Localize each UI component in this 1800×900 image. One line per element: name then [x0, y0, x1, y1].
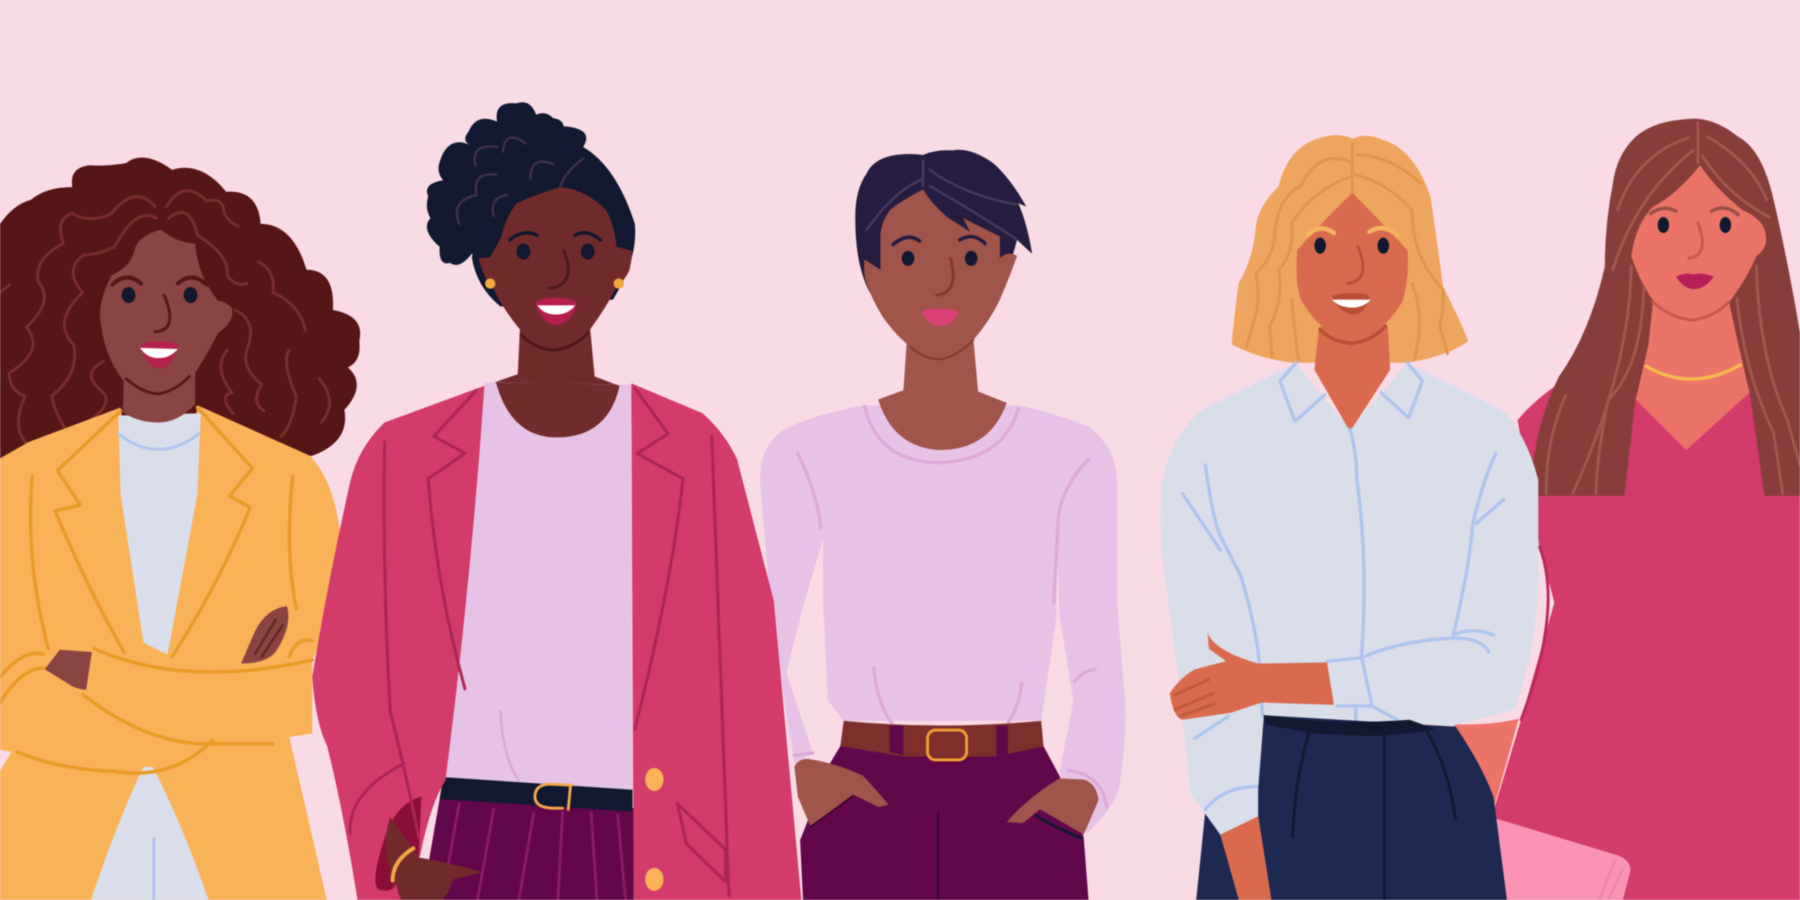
trousers: [800, 746, 1089, 900]
woman 1: curly auburn hair, yellow blazer: [0, 158, 360, 900]
dress: [1481, 383, 1800, 900]
centre line: [153, 838, 155, 900]
neck: [123, 373, 195, 422]
facial features: [112, 278, 207, 394]
buckle: [928, 730, 967, 760]
necklace: [1646, 365, 1740, 379]
top: [442, 382, 633, 792]
shirt: [1161, 363, 1538, 835]
face: [1297, 193, 1408, 343]
hand: left: [45, 650, 92, 690]
dress centre: [1624, 390, 1764, 496]
facial features: [893, 237, 985, 359]
sweater: [760, 405, 1126, 833]
hair: [855, 150, 1032, 315]
woman 4: blonde bob, white shirt, navy trousers: [1161, 135, 1538, 900]
bracelet: [393, 848, 413, 880]
blazer: left panel: [312, 386, 484, 900]
buttons: [645, 768, 664, 891]
hand: right: [1007, 778, 1099, 835]
top folds: [501, 712, 519, 781]
face: [479, 187, 632, 350]
hair strands: [1247, 143, 1448, 359]
neck: [878, 340, 1007, 450]
folder: [1488, 818, 1630, 900]
lower forearm: [1220, 816, 1273, 900]
face: [864, 189, 1017, 358]
shirt lines: [1182, 429, 1504, 809]
hair strands: [867, 161, 1016, 239]
waistband: [1264, 715, 1435, 736]
collar: [864, 406, 1018, 463]
facial features: [1308, 228, 1397, 343]
hand: [386, 817, 482, 900]
woman 3: short dark hair, lilac sweater, plum trousers: [760, 150, 1126, 900]
facial features: [485, 233, 624, 350]
hand: left: [794, 759, 889, 827]
lower shirt: [87, 767, 212, 900]
woman 5: long brown hair, pink dress: [1453, 119, 1800, 900]
hair: [1533, 119, 1800, 496]
hair bun: [427, 102, 586, 265]
neck and chest: [1636, 301, 1749, 450]
face: [1631, 165, 1766, 320]
fingers: [1176, 680, 1215, 716]
forearm and hand: [1170, 634, 1334, 720]
belt loops: [890, 726, 1008, 757]
facial features: [1651, 208, 1738, 320]
blazer: [0, 405, 341, 900]
blazer: right panel: [631, 383, 802, 900]
neck and chest: [488, 327, 631, 453]
shirt: [118, 413, 201, 654]
collar line: [118, 434, 199, 449]
collar: [1280, 363, 1422, 421]
woman 2: black curly updo, pink blazer, plum skirt: [312, 102, 802, 900]
trousers: [1258, 715, 1508, 900]
trouser lines: [1293, 731, 1456, 900]
trousers: left sliver: [1195, 810, 1244, 900]
belt: [440, 777, 633, 812]
buckle: [535, 784, 572, 809]
belt: [840, 721, 1043, 757]
pocket: [375, 797, 421, 891]
folder pages: [1599, 860, 1622, 900]
sweater lines: [794, 453, 1107, 807]
hair: [1232, 135, 1468, 363]
back hair: [472, 147, 635, 307]
hair strands: [0, 191, 330, 448]
neck: [1314, 327, 1390, 432]
face: [100, 230, 232, 396]
hair curls: [457, 138, 583, 224]
hair strands: [1546, 123, 1800, 494]
arm: [1453, 719, 1519, 809]
blazer lines: [0, 408, 312, 773]
pocket lines: [810, 797, 853, 827]
blazer lines: [350, 388, 729, 895]
hand: right: [241, 606, 288, 664]
hair: [0, 158, 360, 464]
skirt: [420, 792, 634, 900]
background sliver: [0, 748, 11, 781]
dress fold: [1521, 546, 1548, 720]
pocket edge: [1035, 815, 1081, 838]
